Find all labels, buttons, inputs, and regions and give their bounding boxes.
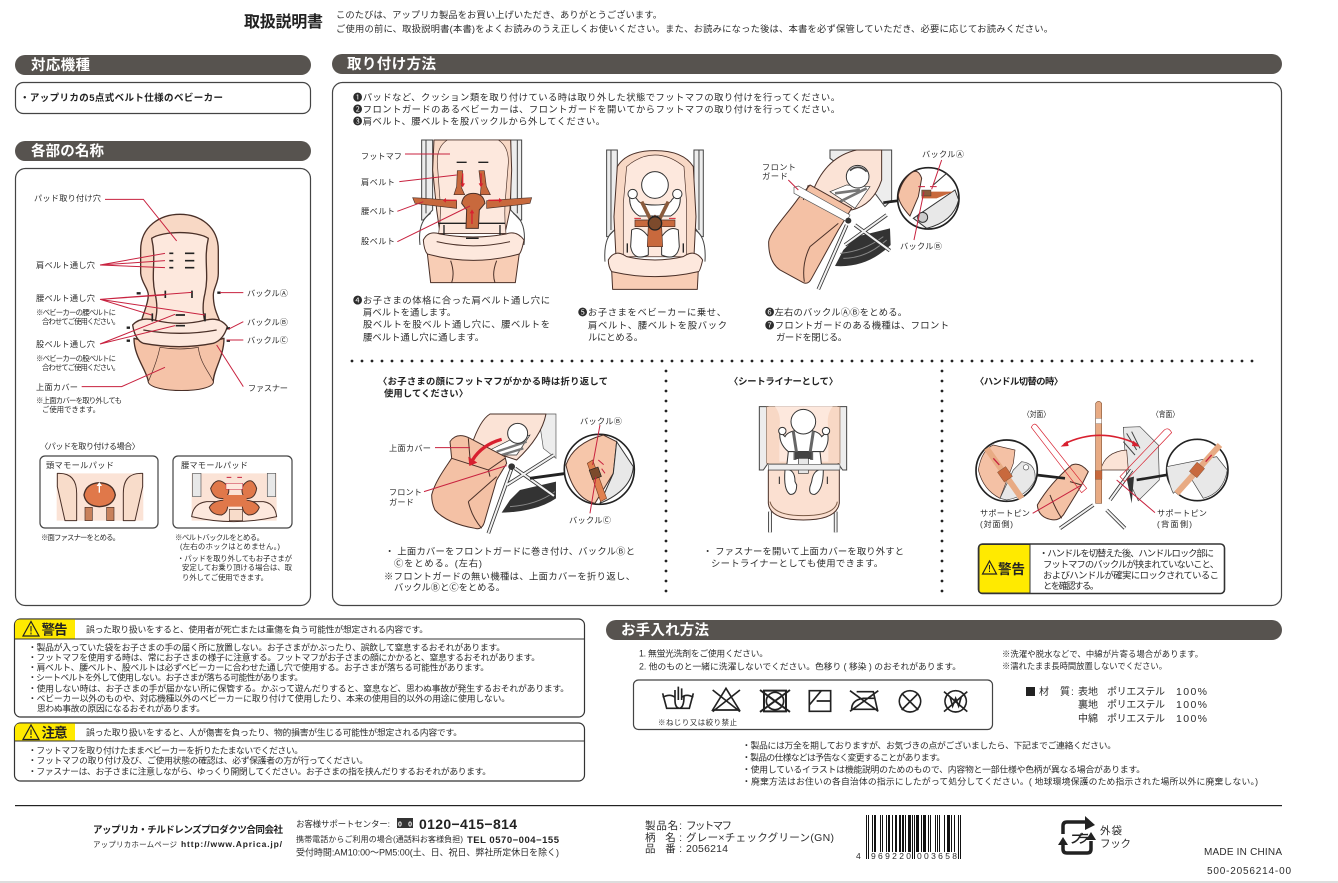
icon: no iron <box>850 691 878 711</box>
fold back text: ・ 上面カバーをフロントガードに巻き付け、バックルⒷと <box>385 546 635 556</box>
illustration labels: fold back: ガード <box>389 497 414 507</box>
company info: アップリカホームページ <box>93 840 178 849</box>
part labels: 合わせてご使用ください。 <box>42 363 120 372</box>
icon: no wet clean <box>944 691 967 712</box>
illustration labels: fold back <box>389 417 622 525</box>
illustration labels: handle: 〈対面〉 <box>1023 409 1050 419</box>
step 6-7 text <box>765 306 949 342</box>
part labels: バックルⒸ <box>247 336 288 345</box>
materials: 中綿 <box>1078 712 1098 725</box>
product notes: ・廃棄方法はお住いの各自治体の指示にしたがって処分してください。( 地球環境保護のため指示された場所以外に廃棄しない。) <box>742 776 1258 786</box>
pad heading: 〈パッドを取り付ける場合〉 <box>40 441 140 451</box>
heading: care: お手入れ方法 <box>621 621 710 639</box>
panel: compatible models <box>16 82 310 114</box>
illustration labels: fold back: 上面カバー <box>389 444 431 453</box>
panel: warning: ・シートベルトを外して使用しない。お子さまが落ちる可能性があります。 <box>28 672 303 682</box>
illustration: fold back <box>424 414 634 533</box>
illustration labels: belts: 腰ベルト <box>361 207 395 216</box>
step 4 text: ❹お子さまの体格に合った肩ベルト通し穴に <box>353 294 550 306</box>
materials: ポリエステル <box>1107 699 1165 711</box>
fold back text: ※フロントガードの無い機種は、上面カバーを折り返し、 <box>384 570 635 582</box>
pad notes: ※面ファスナーをとめる。 <box>41 533 120 542</box>
support info: 0 0 <box>398 822 412 828</box>
product info: 品 番: <box>645 843 682 855</box>
pad notes: (左右のホックはとめません。) <box>180 542 280 551</box>
materials: 100% <box>1176 699 1207 711</box>
subsection title: fold back: 〈お子さまの顔にフットマフがかかる時は折り返して <box>378 376 608 386</box>
subsection title: fold back <box>378 376 608 398</box>
illustration labels: belts: フットマフ <box>361 152 402 161</box>
product notes: ・使用しているイラストは機能説明のためのもので、内容物と一部仕様や色柄が異なる場合があります。 <box>742 764 1145 774</box>
support info: TEL 0570−004−155 <box>467 835 560 846</box>
panel: compatible models: ・アップリカの5点式ベルト仕様のベビーカー <box>20 92 223 104</box>
warning box: handle: およびハンドルが確実にロックされているこ <box>1043 570 1219 580</box>
product info: 柄 名: <box>645 831 682 844</box>
panel: warning <box>14 619 585 717</box>
pad notes <box>41 533 293 582</box>
fold back text: バックルⒷとⒸをとめる。 <box>394 582 505 592</box>
panel: head pad <box>40 456 158 528</box>
materials: 質 <box>1060 685 1070 698</box>
seat liner text <box>703 546 904 568</box>
illustration: baby seated <box>605 150 705 289</box>
part labels: バックルⒷ <box>247 318 288 327</box>
care notes: ※濡れたまま長時間放置しないでください。 <box>1002 661 1167 671</box>
illustration labels: muff: ガード <box>762 171 788 181</box>
part labels: ファスナー <box>248 384 288 393</box>
product notes <box>742 740 1258 786</box>
panel: waist pad <box>173 456 292 528</box>
panel: caution: ・フットマフの取り付け及び、ご使用状態の確認は、必ず保護者の方が行ってください。 <box>28 754 368 766</box>
illustration labels: belts <box>361 152 402 246</box>
part labels: 合わせてご使用ください。 <box>42 317 120 326</box>
panel: attachment method <box>332 82 1282 606</box>
part labels: 上面カバー <box>36 383 78 392</box>
panel: caution: 誤った取り扱いをすると、人が傷害を負ったり、物的損害が生じる可能性が想定される内容です。 <box>86 726 462 738</box>
product info <box>645 819 834 855</box>
illustration: handle switching <box>976 401 1228 528</box>
heading: part names: 各部の名称 <box>31 142 104 160</box>
step 4 text: 肩ベルトを通します。 <box>363 308 456 318</box>
materials: 100% <box>1176 713 1207 725</box>
illustration labels: belts: 肩ベルト <box>361 178 395 187</box>
step 6-7 text: ❻左右のバックルⒶⒷをとめる。 <box>765 306 907 318</box>
support info: 受付時間:AM10:00〜PM5:00(土、日、祝日、弊社所定休日を除く) <box>296 846 559 858</box>
product info: 2056214 <box>686 843 728 855</box>
panel: warning: ・ベビーカー以外のものや、対応機種以外のベビーカーに取り付けて使用したり、本来の使用目的以外の用途に使用しない。 <box>28 692 510 704</box>
illustration labels: handle: サポートピン <box>1157 509 1207 518</box>
subsection title: fold back: 使用してください〉 <box>384 388 468 398</box>
icon: circle in square <box>766 692 784 710</box>
barcode <box>856 815 960 861</box>
seat liner text: シートライナーとしても使用できます。 <box>711 558 883 568</box>
panel: warning: ・使用しない時は、お子さまの手が届かない所に保管する。かぶって遊んだりすると、窒息など、思わぬ事故が発生するおそれがあります。 <box>28 682 569 694</box>
care notes: ※洗濯や脱水などで、中綿が片寄る場合があります。 <box>1002 649 1203 659</box>
heading: attachment: 取り付け方法 <box>347 55 436 73</box>
fold back text: Ⓒをとめる。(左右) <box>394 558 482 568</box>
care instructions: 1. 無蛍光洗剤をご使用ください。 <box>639 648 768 658</box>
made in: MADE IN CHINA <box>1204 847 1282 858</box>
panel: warning: ・肩ベルト、腰ベルト、股ベルトは必ずベビーカーに合わせた通し穴で使用する。お子さまが落ちる可能性があります。 <box>28 662 489 672</box>
panel: care symbols: ※ねじり又は絞り禁止 <box>658 718 737 727</box>
product info: グレー×チェックグリーン(GN) <box>686 831 834 844</box>
illustration labels: muff: バックルⒷ <box>900 242 942 251</box>
step 4 text: 股ベルトを股ベルト通し穴に、腰ベルトを <box>363 320 550 330</box>
illustration labels: muff: フロント <box>762 163 796 172</box>
icon: no tumble dry <box>760 690 790 712</box>
pad notes: ・パッドを取り外してもお子さまが <box>177 554 293 563</box>
part labels: 股ベルト通し穴 <box>36 339 95 349</box>
recycle label: 外袋 <box>1100 824 1122 837</box>
part labels: 肩ベルト通し穴 <box>36 260 95 270</box>
step 5 text: 肩ベルト、腰ベルトを股バック <box>588 320 727 330</box>
illustration labels: fold back: バックルⒷ <box>580 417 622 426</box>
attachment steps 1-3 <box>353 92 840 126</box>
heading: compatible models <box>15 55 311 75</box>
icon: hand wash <box>663 687 693 708</box>
illustration labels: muff <box>762 150 964 251</box>
panel: warning: ・製品が入っていた袋をお子さまの手の届く所に放置しない。お子さまがかぶったり、誤飲して窒息するおそれがあります。 <box>28 642 505 652</box>
part labels: ご使用できます。 <box>42 405 100 414</box>
part labels: ※ベビーカーの股ベルトに <box>36 354 116 363</box>
panel: care symbols <box>634 680 992 730</box>
heading: attachment <box>332 54 1282 74</box>
part labels: 腰ベルト通し穴 <box>36 293 95 303</box>
illustration labels: fold back: バックルⒸ <box>569 516 611 525</box>
materials: 裏地 <box>1078 698 1098 711</box>
panel: warning: 誤った取り扱いをすると、使用者が死亡または重傷を負う可能性が想定される内容です。 <box>86 624 428 634</box>
product info: フットマフ <box>686 820 732 832</box>
step 4 text <box>353 294 550 342</box>
intro text: このたびは、アップリカ製品をお買い上げいただき、ありがとうございます。 <box>336 9 662 20</box>
barcode: 969220 <box>871 851 911 861</box>
pad notes: ※ベルトバックルをとめる。 <box>175 533 264 542</box>
seat liner text: ・ ファスナーを開いて上面カバーを取り外すと <box>703 546 904 556</box>
support info: お客様サポートセンター: <box>296 819 390 829</box>
care instructions <box>639 648 961 672</box>
heading: part names <box>15 141 311 161</box>
panel: warning: 思わぬ事故の原因になるおそれがあります。 <box>37 702 205 714</box>
part labels: ※上面カバーを取り外しても <box>36 396 122 405</box>
support info: 0120−415−814 <box>419 816 517 832</box>
illustration: belts through holes <box>397 140 532 283</box>
company info: アップリカ・チルドレンズプロダクツ合同会社 <box>93 824 283 836</box>
part labels: ※ベビーカーの腰ベルトに <box>36 308 116 317</box>
part labels: バックルⒶ <box>247 289 288 298</box>
heading: care <box>606 620 1282 640</box>
illustration labels: fold back: フロント <box>389 488 422 497</box>
warning box: handle: ・ハンドルを切替えた後、ハンドルロック部に <box>1039 548 1214 558</box>
parts diagram: footmuff <box>82 199 243 390</box>
materials: 材 <box>1039 685 1049 698</box>
product info: 製品名: <box>645 819 682 832</box>
panel: part names <box>16 168 310 606</box>
pad notes: 安定してお乗り頂ける場合は、取 <box>182 563 293 572</box>
icon: line dry <box>809 691 831 711</box>
step 5 text <box>578 306 727 342</box>
materials: ポリエステル <box>1107 713 1165 725</box>
recycle label: フック <box>1100 838 1131 850</box>
pad notes: り外してご使用できます。 <box>182 573 268 582</box>
care notes <box>1002 649 1203 671</box>
step 6-7 text: ガードを閉じる。 <box>776 332 847 342</box>
panel: head pad: 頭マモールパッド <box>46 461 114 470</box>
company info: http://www.Aprica.jp/ <box>181 839 283 849</box>
product notes: ・製品には万全を期しておりますが、お気づきの点がございましたら、下記までご連絡ください。 <box>742 740 1116 750</box>
panel: caution: ・ファスナーは、お子さまに注意しながら、ゆっくり開閉してください。お子さまの指を挟んだりするおそれがあります。 <box>28 766 491 776</box>
care instructions: 2. 他のものと一緒に洗濯しないでください。色移り ( 移染 ) のおそれがあります。 <box>639 660 961 672</box>
illustration labels: handle: サポートピン <box>980 509 1030 518</box>
intro text <box>336 9 1053 34</box>
fold back text <box>384 546 635 592</box>
illustration labels: handle: (対面側) <box>980 519 1013 529</box>
dotted separators <box>352 361 1262 596</box>
attachment steps 1-3: ❸肩ベルト、腰ベルトを股バックルから外してください。 <box>353 116 605 126</box>
illustration: muff closed side view <box>769 150 959 289</box>
icon: plastic recycle mark <box>1058 816 1096 853</box>
attachment steps 1-3: ❶パッドなど、クッション類を取り付けている時は取り外した状態でフットマフの取り付けを行ってください。 <box>353 92 840 102</box>
product notes: ・製品の仕様などは予告なく変更することがあります。 <box>742 752 945 762</box>
illustration labels: muff: バックルⒶ <box>922 150 964 159</box>
subsection title: handle switch: 〈ハンドル切替の時〉 <box>975 376 1063 386</box>
panel: caution: 注意 <box>42 724 68 740</box>
product code: 500-2056214-00 <box>1207 866 1291 877</box>
warning box: handle: とを確認する。 <box>1043 580 1099 591</box>
illustration: seat liner <box>759 407 847 532</box>
attachment steps 1-3: ❷フロントガードのあるベビーカーは、フロントガードを開いてからフットマフの取り付けを行ってください。 <box>353 104 840 114</box>
warning box: handle <box>978 544 1224 594</box>
support info <box>296 816 560 858</box>
intro text: ご使用の前に、取扱説明書(本書)をよくお読みのうえ正しくお使いください。また、お読みになった後は、本書を必ず保管していただき、必要に応じてお読みください。 <box>336 23 1053 34</box>
materials: 表地 <box>1078 685 1098 698</box>
materials: : <box>1071 687 1074 698</box>
panel: warning: ・フットマフを使用する時は、常にお子さまの様子に注意する。フットマフがお子さまの顔にかかると、窒息するおそれがあります。 <box>28 652 540 662</box>
panel: caution <box>14 723 585 781</box>
illustration labels: handle <box>980 409 1207 529</box>
icon: no bleach <box>713 688 740 712</box>
step 5 text: ルにとめる。 <box>588 332 643 342</box>
part labels <box>34 193 288 414</box>
part labels: パッド取り付け穴 <box>34 193 101 203</box>
step 5 text: ❺お子さまをベビーカーに乗せ、 <box>578 306 726 318</box>
barcode: 4 <box>856 851 861 861</box>
recycle label <box>1100 824 1131 850</box>
warning box: handle: フットマフのバックルが挟まれていないこと、 <box>1043 558 1219 570</box>
step 4 text: 腰ベルト通し穴に通します。 <box>363 332 484 342</box>
panel: waist pad: 腰マモールパッド <box>181 461 248 470</box>
illustration labels: handle: (背面側) <box>1157 519 1192 529</box>
materials: ポリエステル <box>1107 686 1165 698</box>
icon: plastic recycle mark: プラ <box>1069 832 1089 846</box>
warning box: handle: 警告 <box>998 561 1025 577</box>
heading: compatible models: 対応機種 <box>31 56 90 74</box>
subsection title: seat liner: 〈シートライナーとして〉 <box>729 376 838 386</box>
title: 取扱説明書 <box>244 12 323 31</box>
support info: 携帯電話からご利用の場合(通話料お客様負担) <box>296 834 463 844</box>
company info <box>93 824 283 849</box>
panel: caution: ・フットマフを取り付けたままベビーカーを折りたたまないでください。 <box>28 744 303 756</box>
materials <box>1026 685 1207 725</box>
icon: no dry clean <box>899 691 921 712</box>
illustration labels: belts: 股ベルト <box>361 237 395 246</box>
materials: 100% <box>1176 686 1207 698</box>
barcode: 003658 <box>917 851 957 861</box>
panel: warning: 警告 <box>42 622 68 638</box>
step 6-7 text: ❼フロントガードのある機種は、フロント <box>765 320 949 330</box>
illustration labels: handle: 〈背面〉 <box>1152 409 1179 419</box>
